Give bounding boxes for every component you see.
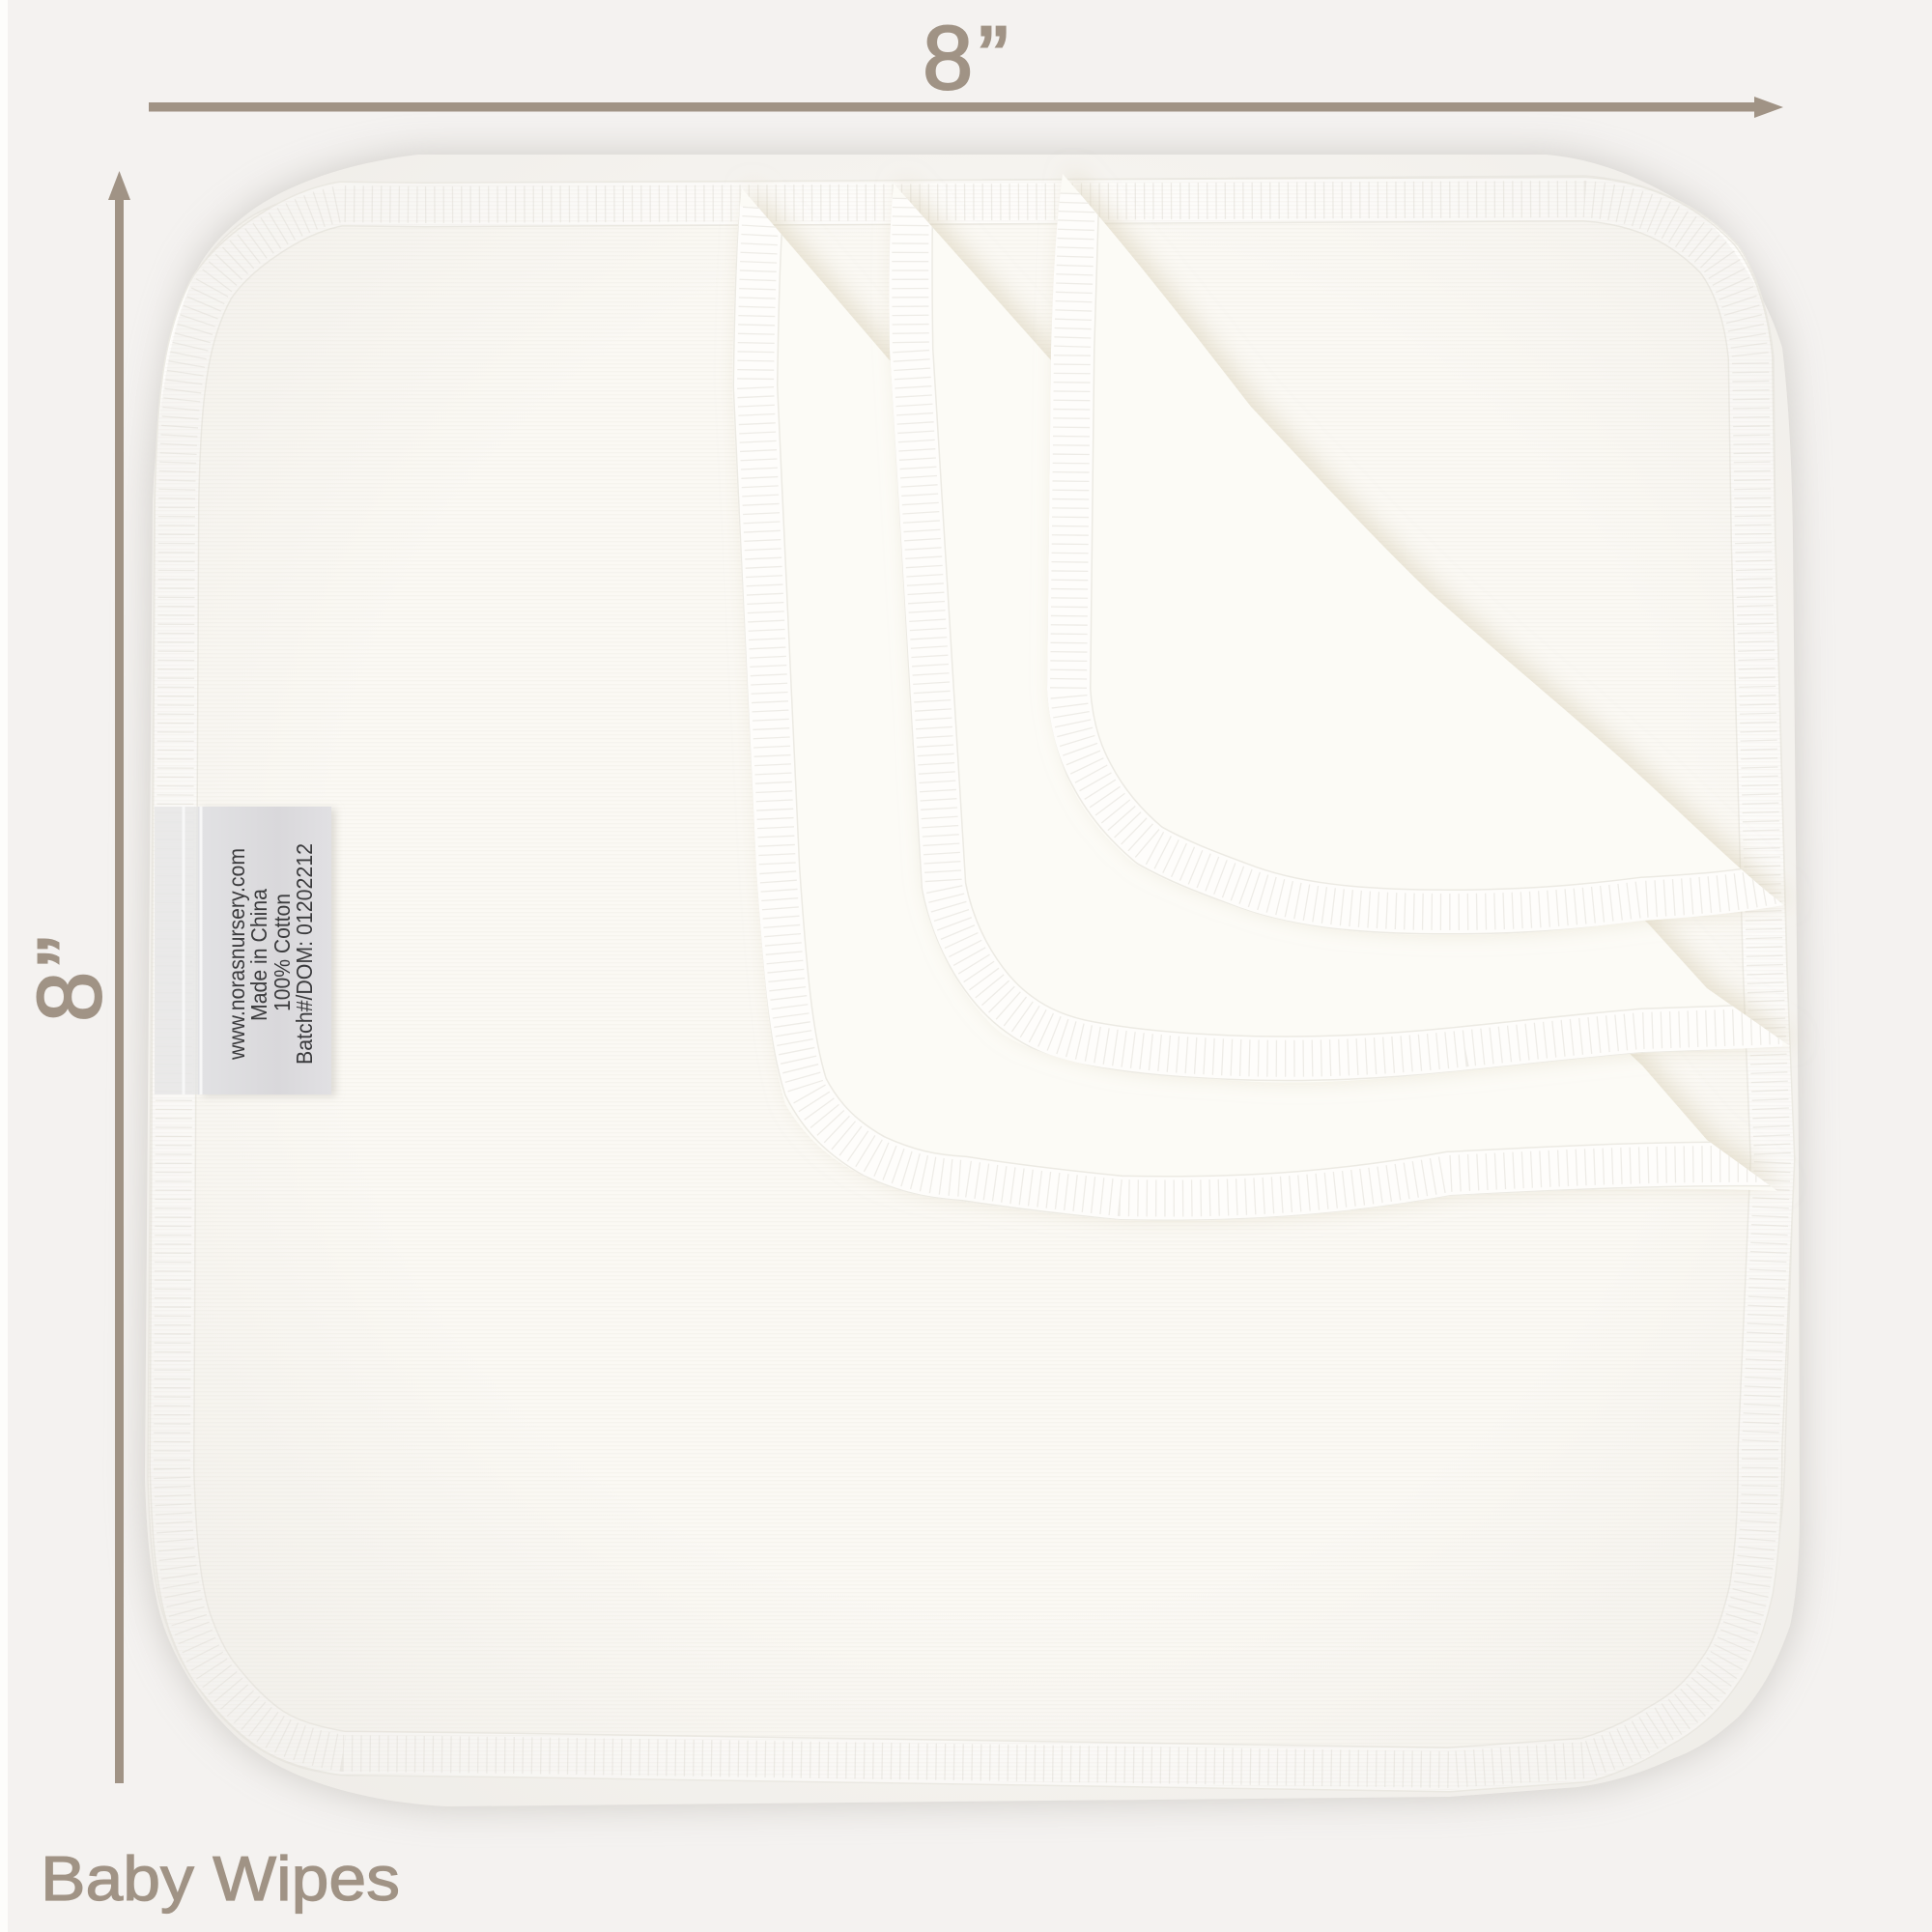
top wipe body [148, 176, 1794, 1790]
label text [224, 843, 317, 1065]
horizontal dimension arrow [149, 97, 1783, 118]
width label: 8” [923, 7, 1009, 108]
knit texture and edge falloff [148, 176, 1794, 1790]
soft shadow under the stack [145, 155, 1800, 1806]
vertical dimension arrow [108, 171, 130, 1783]
sewn-in care label [155, 807, 331, 1094]
lower wipes in the stack [145, 155, 1800, 1806]
folded flap 1 (back) [732, 188, 1777, 1221]
folded flap 3 (front) [1047, 174, 1784, 935]
height label: 8” [18, 936, 120, 1022]
product name: Baby Wipes [41, 1843, 400, 1914]
label text: Batch#/DOM: 01202212 [292, 843, 317, 1065]
label text: www.norasnursery.com [224, 848, 249, 1061]
label stitched tab [155, 807, 199, 1094]
wipe stack photo [145, 155, 1800, 1806]
top wipe overlock stitching [172, 199, 1773, 1770]
label body [198, 807, 331, 1094]
label text: 100% Cotton [270, 894, 295, 1011]
label stitch lines [184, 807, 201, 1094]
left white margin strip [0, 0, 8, 1932]
folded flap 2 (middle) [889, 184, 1790, 1083]
label text: Made in China [246, 889, 271, 1021]
